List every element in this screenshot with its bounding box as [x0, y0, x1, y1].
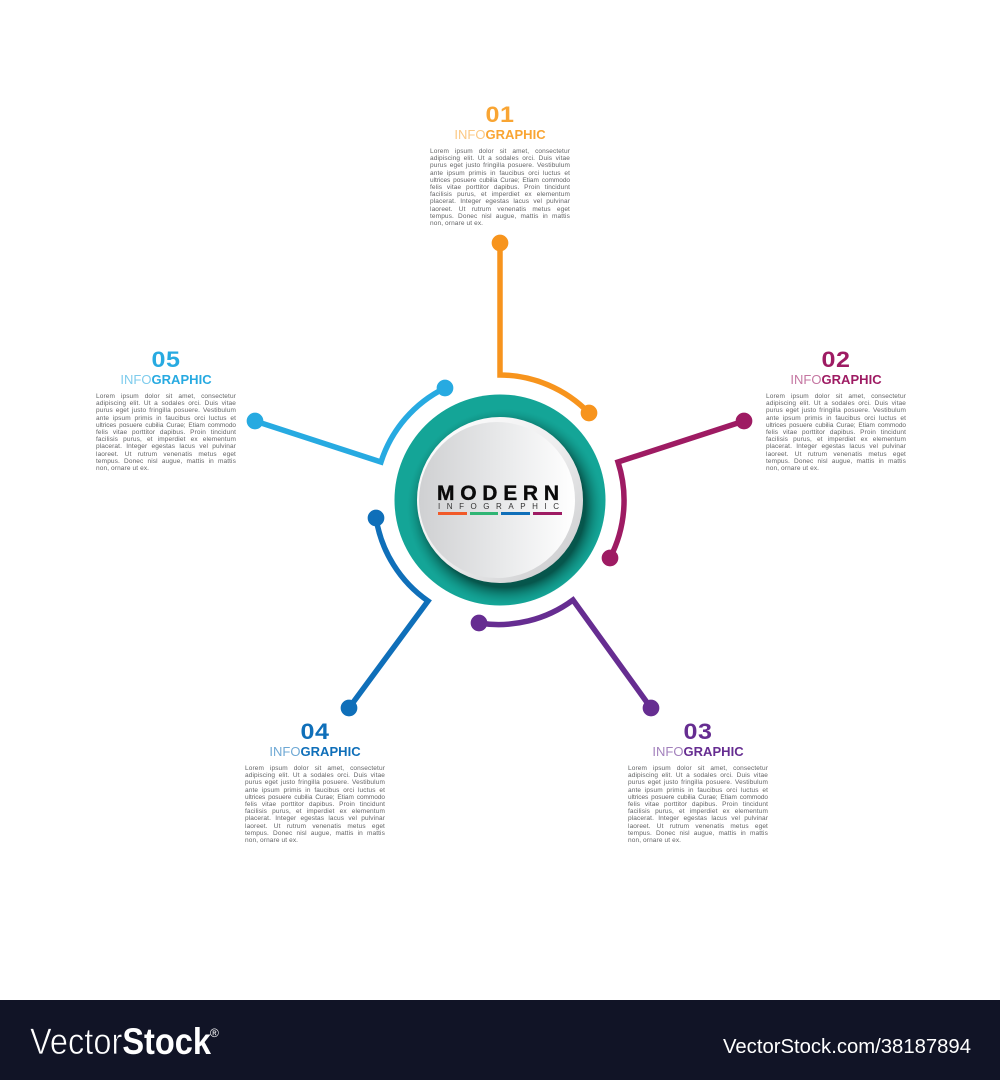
- text 05: ante ipsum primis in faucibus orci luctus et: [96, 415, 236, 422]
- text 05: non, ornare ut ex.: [96, 465, 149, 472]
- number 04: 04: [300, 719, 330, 744]
- text 01: placerat. Integer egestas lacus vel pulvinar: [430, 198, 570, 205]
- white disc rim: [417, 417, 583, 583]
- text 03: purus eget justo fringilla posuere. Vestibulum: [628, 779, 768, 786]
- heading 01: INFOGRAPHIC: [454, 126, 546, 142]
- text 01: tempus. Donec nisl augue, mattis in mattis: [430, 213, 570, 220]
- text 04: Lorem ipsum dolor sit amet, consectetur: [245, 765, 385, 772]
- footer bar: ®: [210, 1026, 219, 1040]
- teal ring: [394, 394, 606, 606]
- connector 05: [249, 382, 451, 462]
- text 03: placerat. Integer egestas lacus vel pulvinar: [628, 815, 768, 822]
- text 02: Lorem ipsum dolor sit amet, consectetur: [766, 393, 906, 400]
- text 05: facilisis purus, et imperdiet ex elementum: [96, 436, 236, 443]
- panel 01: [430, 102, 570, 227]
- footer bar: VectorStock: [30, 1021, 211, 1062]
- text 03: adipiscing elit. Ut a sodales orci. Duis vitae: [628, 772, 768, 779]
- text 01: adipiscing elit. Ut a sodales orci. Duis vitae: [430, 155, 570, 162]
- text 02: facilisis purus, et imperdiet ex elementum: [766, 436, 906, 443]
- text 05: Lorem ipsum dolor sit amet, consectetur: [96, 393, 236, 400]
- center title: [437, 482, 562, 515]
- connector 02: [604, 415, 750, 564]
- panel 02: [766, 347, 906, 472]
- text 02: tempus. Donec nisl augue, mattis in mattis: [766, 458, 906, 465]
- number 05: 05: [151, 347, 181, 372]
- text 04: laoreet. Ut rutrum venenatis metus eget: [245, 822, 385, 830]
- text 04: tempus. Donec nisl augue, mattis in mattis: [245, 830, 385, 837]
- text 05: laoreet. Ut rutrum venenatis metus eget: [96, 450, 236, 458]
- text 04: ultrices posuere cubilia Curae; Etiam commodo: [245, 794, 385, 801]
- text 03: ante ipsum primis in faucibus orci luctus et: [628, 787, 768, 794]
- text 01: purus eget justo fringilla posuere. Vestibulum: [430, 162, 570, 169]
- text 04: non, ornare ut ex.: [245, 837, 298, 844]
- text 01: ultrices posuere cubilia Curae; Etiam commodo: [430, 177, 570, 184]
- text 01: non, ornare ut ex.: [430, 220, 483, 227]
- text 04: ante ipsum primis in faucibus orci luctus et: [245, 787, 385, 794]
- number 02: 02: [821, 347, 851, 372]
- text 02: laoreet. Ut rutrum venenatis metus eget: [766, 450, 906, 458]
- text 01: [430, 148, 570, 227]
- heading 04: INFOGRAPHIC: [269, 744, 361, 758]
- text 05: placerat. Integer egestas lacus vel pulvinar: [96, 443, 236, 450]
- text 03: tempus. Donec nisl augue, mattis in mattis: [628, 830, 768, 837]
- number 01: 01: [485, 102, 515, 127]
- text 05: adipiscing elit. Ut a sodales orci. Duis vitae: [96, 400, 236, 407]
- text 04: adipiscing elit. Ut a sodales orci. Duis vitae: [245, 772, 385, 779]
- heading 02: INFOGRAPHIC: [790, 372, 882, 386]
- text 03: [628, 765, 768, 844]
- panel 03: [628, 719, 768, 844]
- text 03: laoreet. Ut rutrum venenatis metus eget: [628, 822, 768, 830]
- text 02: ultrices posuere cubilia Curae; Etiam commodo: [766, 422, 906, 429]
- heading 03: INFOGRAPHIC: [652, 744, 744, 758]
- text 04: felis vitae porttitor dapibus. Proin tincidunt: [245, 801, 385, 808]
- text 03: facilisis purus, et imperdiet ex elementum: [628, 808, 768, 815]
- disc shadow: [407, 409, 603, 605]
- inner disc: [419, 422, 575, 578]
- text 04: facilisis purus, et imperdiet ex elementum: [245, 808, 385, 815]
- text 05: [96, 393, 236, 472]
- text 01: felis vitae porttitor dapibus. Proin tincidunt: [430, 184, 570, 191]
- center title: MODERN: [437, 482, 559, 505]
- text 05: tempus. Donec nisl augue, mattis in mattis: [96, 458, 236, 465]
- text 03: non, ornare ut ex.: [628, 837, 681, 844]
- heading 05: INFOGRAPHIC: [120, 372, 212, 386]
- text 01: ante ipsum primis in faucibus orci luctus et: [430, 170, 570, 177]
- text 04: [245, 765, 385, 844]
- text 03: felis vitae porttitor dapibus. Proin tincidunt: [628, 801, 768, 808]
- number 03: 03: [683, 719, 713, 744]
- text 04: placerat. Integer egestas lacus vel pulvinar: [245, 815, 385, 822]
- text 05: purus eget justo fringilla posuere. Vestibulum: [96, 407, 236, 414]
- text 05: ultrices posuere cubilia Curae; Etiam commodo: [96, 422, 236, 429]
- text 02: placerat. Integer egestas lacus vel pulvinar: [766, 443, 906, 450]
- connector 01: [494, 237, 595, 419]
- text 05: felis vitae porttitor dapibus. Proin tincidunt: [96, 429, 236, 436]
- panel 05: [96, 347, 236, 472]
- connector 04: [343, 512, 428, 714]
- text 02: adipiscing elit. Ut a sodales orci. Duis vitae: [766, 400, 906, 407]
- connector 03: [473, 600, 657, 714]
- text 01: facilisis purus, et imperdiet ex elementum: [430, 191, 570, 198]
- center title: INFOGRAPHIC: [438, 502, 559, 511]
- text 01: Lorem ipsum dolor sit amet, consectetur: [430, 148, 570, 155]
- text 03: ultrices posuere cubilia Curae; Etiam commodo: [628, 794, 768, 801]
- text 01: laoreet. Ut rutrum venenatis metus eget: [430, 206, 570, 212]
- text 02: ante ipsum primis in faucibus orci luctus et: [766, 415, 906, 422]
- text 02: purus eget justo fringilla posuere. Vestibulum: [766, 407, 906, 414]
- text 02: felis vitae porttitor dapibus. Proin tincidunt: [766, 429, 906, 436]
- footer bar: [0, 1000, 1000, 1080]
- panel 04: [245, 719, 385, 844]
- text 02: non, ornare ut ex.: [766, 465, 819, 472]
- text 02: [766, 393, 906, 472]
- text 03: Lorem ipsum dolor sit amet, consectetur: [628, 765, 768, 772]
- text 04: purus eget justo fringilla posuere. Vestibulum: [245, 779, 385, 786]
- footer bar: VectorStock.com/38187894: [723, 1036, 971, 1058]
